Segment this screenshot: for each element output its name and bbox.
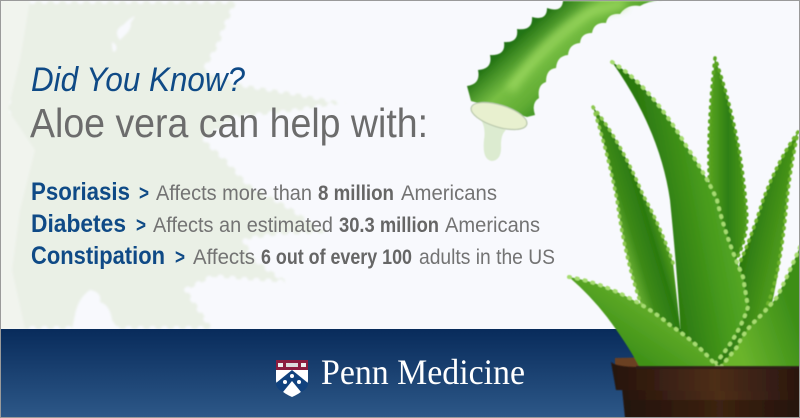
- text row: diabetes: Diabetes: [31, 210, 126, 238]
- text row: diabetes: Affects an estimated: [153, 214, 333, 237]
- gel drip: [481, 120, 506, 161]
- leaf: lower right: [715, 247, 800, 372]
- leaf highlight: [510, 3, 625, 90]
- text row: diabetes: [31, 210, 540, 238]
- text row: psoriasis: >: [139, 182, 149, 205]
- text row: constipation: Constipation: [31, 242, 165, 270]
- text row: constipation: 6 out of every 100: [261, 246, 412, 269]
- footer band: [0, 329, 800, 418]
- cut face: [468, 97, 530, 135]
- aloe plant: [569, 58, 800, 372]
- leaf: thin left: [593, 107, 682, 345]
- text row: constipation: Affects: [193, 246, 255, 269]
- leaf body: [467, 1, 663, 117]
- text row: diabetes: Americans: [445, 214, 540, 237]
- pot soil rim: [615, 354, 800, 372]
- text row: psoriasis: [31, 178, 497, 206]
- text row: psoriasis: 8 million: [318, 182, 394, 205]
- cut aloe leaf: [467, 1, 663, 161]
- leaf: far right: [708, 132, 798, 370]
- leaf: centre right: [709, 58, 747, 290]
- heading: aloe vera can help with: Aloe vera can help with:: [30, 100, 428, 146]
- text row: constipation: adults in the US: [419, 246, 555, 269]
- text row: diabetes: >: [136, 214, 146, 237]
- pot: [611, 362, 800, 418]
- leaf: large centre: [612, 62, 748, 366]
- title: did you know: Did You Know?: [31, 61, 245, 99]
- text row: psoriasis: Psoriasis: [31, 178, 130, 206]
- text row: diabetes: 30.3 million: [339, 214, 439, 237]
- leaf: lower left: [569, 277, 718, 368]
- icon: penn shield: [276, 360, 308, 397]
- text row: constipation: [31, 242, 555, 270]
- background ghost aloe: [0, 0, 347, 329]
- text row: constipation: >: [175, 246, 185, 269]
- text row: psoriasis: Americans: [401, 182, 497, 205]
- text row: psoriasis: Affects more than: [156, 182, 312, 205]
- logo text: penn medicine: Penn Medicine: [321, 352, 525, 392]
